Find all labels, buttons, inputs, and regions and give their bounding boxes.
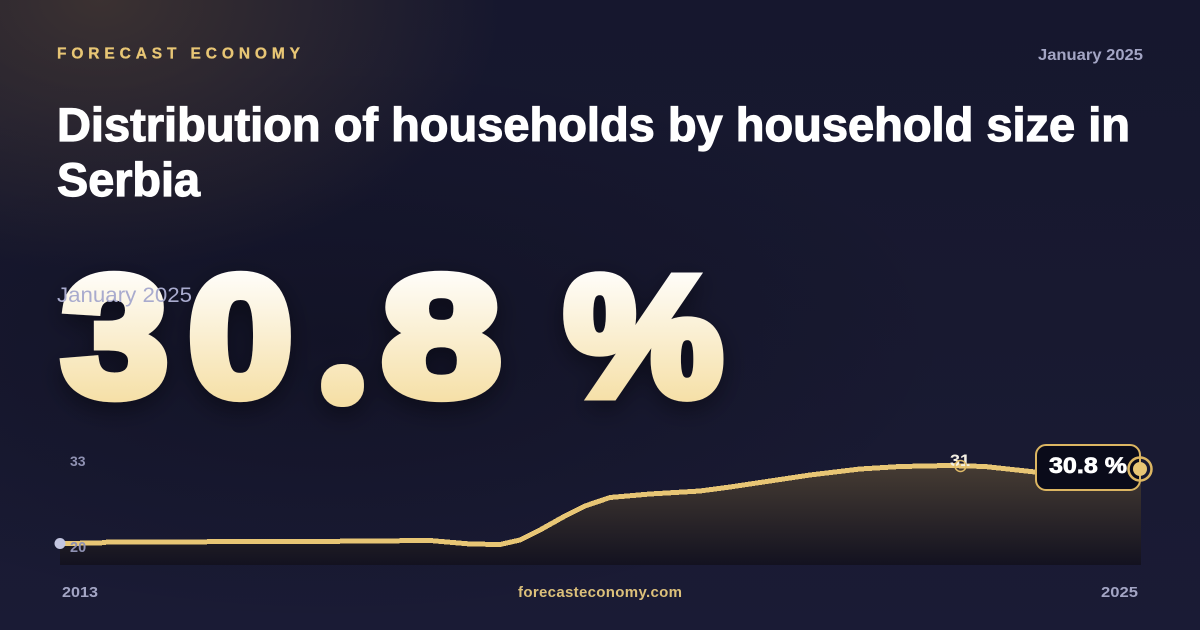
big value: 0 bbox=[188, 241, 293, 431]
end marker bbox=[1128, 458, 1152, 480]
chart area fill bbox=[60, 466, 1141, 565]
big value: 3 bbox=[62, 242, 168, 432]
overlapping date label: January 2025 bbox=[57, 284, 192, 307]
peak marker bbox=[955, 460, 966, 472]
axis label: 33: 33 bbox=[70, 453, 86, 469]
title: Distribution of households by household size in bbox=[57, 98, 1130, 151]
source: forecasteconomy.com bbox=[518, 584, 682, 601]
value callout bbox=[1036, 445, 1140, 490]
big value: 8 bbox=[382, 241, 501, 431]
start year: 2013 bbox=[62, 584, 98, 601]
value callout: 30.8 % bbox=[1049, 453, 1127, 478]
big value: % bbox=[564, 241, 722, 431]
big value bbox=[62, 241, 722, 432]
start point bbox=[54, 538, 66, 549]
peak label: 31 bbox=[950, 451, 970, 470]
end year: 2025 bbox=[1101, 584, 1138, 601]
date label: January 2025 bbox=[1038, 47, 1143, 64]
big value: . bbox=[340, 370, 345, 392]
line chart bbox=[54, 445, 1152, 565]
axis label: 20: 20 bbox=[70, 540, 86, 556]
title bbox=[57, 98, 1130, 206]
brand label: FORECAST ECONOMY bbox=[57, 46, 301, 62]
title: Serbia bbox=[57, 153, 201, 206]
chart line bbox=[60, 466, 1140, 544]
